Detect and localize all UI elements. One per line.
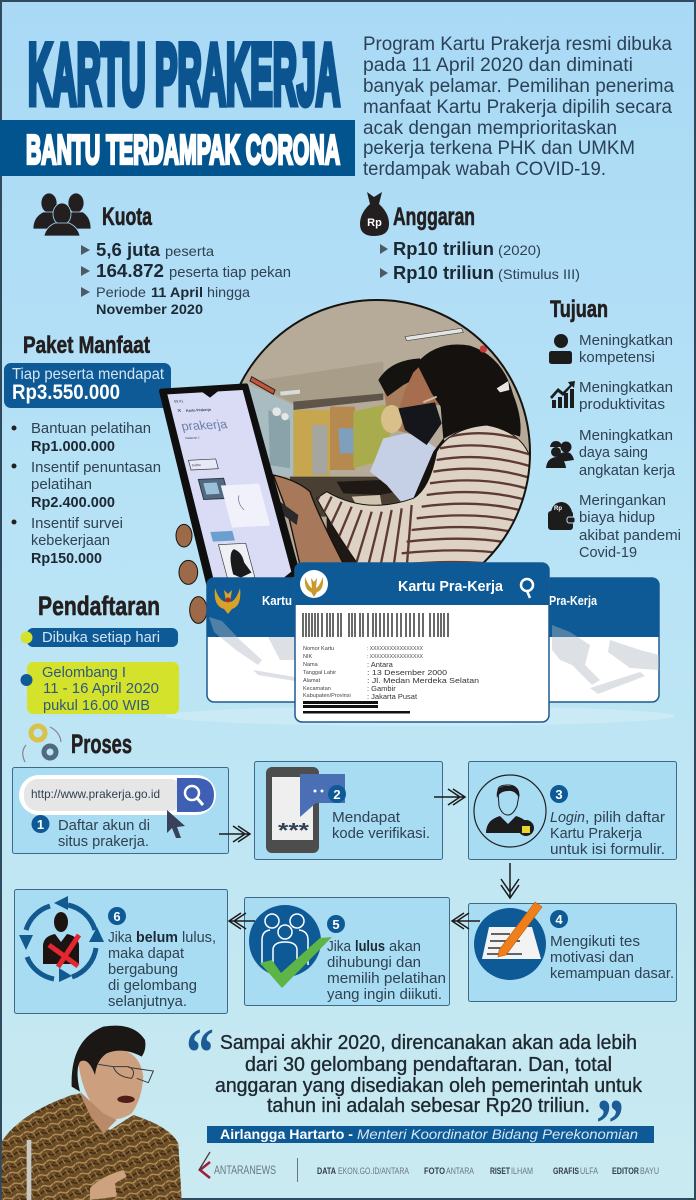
quotation text: Sampai akhir 2020, direncanakan akan ada lebih	[220, 1032, 637, 1054]
step 2 panel: kode verifikasi.	[332, 825, 430, 842]
quotation text: tahun ini adalah sebesar Rp20 triliun.	[267, 1095, 590, 1117]
step 5 panel: yang ingin diikuti.	[327, 986, 442, 1003]
icon: money bag (anggaran): Rp	[367, 217, 382, 229]
icon: money bag (anggaran)	[360, 192, 389, 236]
front card: Kartu Pra-Kerja	[295, 563, 549, 722]
step 4 panel	[468, 902, 676, 1002]
footer credits: BAYU	[640, 1166, 659, 1176]
tujuan list: Meningkatkan	[579, 427, 673, 444]
quotation text	[215, 1032, 643, 1117]
kuota list: 11 April	[151, 284, 203, 300]
step 1 panel: Daftar akun di	[58, 817, 150, 834]
front card: Kartu Pra-Kerja: Tanggal Lahir	[303, 670, 336, 676]
heading: Anggaran: Anggaran	[393, 203, 475, 231]
phone held in hand: prakerja	[180, 417, 230, 433]
intro paragraph: acak dengan memprioritaskan	[363, 118, 617, 139]
portrait: Airlangga Hartarto	[2, 1026, 182, 1200]
anggaran list: Rp10 triliun	[393, 263, 494, 283]
icon: gears	[23, 726, 61, 762]
quotation text: anggaran yang disediakan oleh pemerintah untuk	[215, 1075, 643, 1097]
icon: group with check	[262, 914, 308, 970]
front card: Kartu Pra-Kerja: Alamat	[303, 678, 321, 684]
speaker band: Menteri Koordinator Bidang Perekonomian	[357, 1126, 638, 1142]
tujuan list: Meningkatkan	[579, 332, 673, 349]
intro paragraph: banyak pelamar. Pemilihan penerima	[363, 76, 674, 97]
step 2 panel: Mendapat	[332, 809, 401, 826]
tujuan list: kompetensi	[579, 349, 655, 366]
front card: Kartu Pra-Kerja: Kecamatan	[303, 686, 331, 692]
intro paragraph	[363, 34, 674, 180]
front card: Kartu Pra-Kerja: NIK	[303, 654, 312, 660]
icon: wallet: Rp	[554, 506, 562, 512]
footer credits	[297, 1158, 659, 1182]
phone held in hand: Kartu Prakerja	[185, 408, 212, 413]
panel: gelombang I schedule: pukul 16.00 WIB	[43, 697, 150, 714]
front card: Kartu Pra-Kerja: : Jakarta Pusat	[367, 692, 418, 701]
icon: wallet	[548, 502, 575, 530]
step 5 panel: memilih pelatihan	[327, 970, 446, 987]
icon: garuda emblem	[215, 588, 240, 614]
icon: people (kuota)	[33, 193, 91, 236]
subtitle band: BANTU TERDAMPAK CORONA	[26, 126, 340, 172]
panel: paket manfaat total: Tiap peserta mendapat	[12, 366, 165, 383]
tujuan list: daya saing	[579, 444, 648, 461]
step 6 panel: belum	[136, 929, 178, 946]
step 5 panel: 5	[332, 917, 340, 932]
subtitle band	[0, 120, 355, 176]
phone held in hand: Halaman 1	[185, 436, 201, 440]
quotation text: dari 30 gelombang pendaftaran. Dan, total	[245, 1054, 612, 1076]
step 4 panel: motivasi dan	[550, 949, 634, 966]
step 5 panel: akan	[389, 938, 421, 955]
front card: Kartu Pra-Kerja: Kartu Pra-Kerja	[398, 578, 504, 595]
step 6 panel: maka dapat	[108, 945, 185, 962]
icon: cursor	[167, 810, 185, 838]
footer credits: RISET	[490, 1166, 510, 1176]
step 4 panel: 4	[555, 912, 563, 927]
panel: gelombang I schedule: 11 - 16 April 2020	[43, 680, 159, 697]
kuota list: 164.872	[96, 261, 164, 281]
arrow: step 2 to 3	[434, 789, 465, 805]
intro paragraph: manfaat Kartu Prakerja dipilih secara	[363, 97, 672, 118]
phone held in hand: Daftar	[191, 463, 202, 467]
step 2 panel: ***	[278, 820, 309, 842]
step 3 panel: Kartu Prakerja	[550, 825, 643, 842]
front card: Kartu Pra-Kerja: : Jl. Medan Merdeka Selatan	[367, 676, 479, 685]
tujuan list: produktivitas	[579, 396, 665, 413]
card shadow	[165, 706, 675, 726]
panel: gelombang I schedule: Gelombang I	[42, 664, 126, 681]
pill: open every day: Dibuka setiap hari	[42, 629, 160, 646]
step 1 panel: 1	[37, 817, 44, 832]
tujuan list: akibat pandemi	[579, 527, 681, 544]
step 3 panel: Login	[550, 809, 585, 826]
step 3 panel: 3	[555, 787, 563, 802]
step 3 panel	[468, 762, 676, 860]
step 2 panel: 2	[333, 787, 341, 802]
front card: Kartu Pra-Kerja: : XXXXXXXXXXXXXXXX	[367, 654, 423, 660]
heading: Paket Manfaat: Paket Manfaat	[23, 332, 150, 359]
kuota list: November 2020	[96, 301, 203, 317]
step 2 panel	[254, 762, 442, 860]
kuota list	[81, 240, 291, 317]
speaker band	[207, 1126, 654, 1143]
icon: rejected person in cycle	[19, 896, 104, 982]
step 5 panel: dihubungi dan	[327, 954, 421, 971]
step 5 panel: lulus	[355, 938, 385, 955]
phone held in hand: 09:41	[174, 399, 184, 404]
front card: Kartu Pra-Kerja: : 13 Desember 2000	[367, 668, 447, 677]
front card: Kartu Pra-Kerja: : XXXXXXXXXXXXXXXX	[367, 646, 423, 652]
step 5 panel: Jika	[327, 938, 352, 955]
step 6 panel: selanjutnya.	[108, 993, 187, 1010]
intro paragraph: pada 11 April 2020 dan diminati	[363, 55, 633, 76]
step 6 panel: bergabung	[108, 961, 178, 978]
tujuan list: angkatan kerja	[579, 462, 676, 479]
icon: paper and pen	[482, 902, 542, 959]
footer credits: FOTO	[424, 1166, 445, 1176]
benefits list: Insentif survei	[31, 515, 123, 532]
arrow: step 5 to 6	[229, 913, 255, 929]
front card: Kartu Pra-Kerja: : Gambir	[367, 684, 396, 693]
intro paragraph: terdampak wabah COVID-19.	[363, 159, 606, 180]
icon: magnifier person	[521, 579, 533, 598]
pill: open every day	[20, 628, 178, 647]
step 5 panel	[244, 898, 450, 1006]
phone held in hand	[161, 386, 297, 628]
arrow: step 4 to 5	[452, 913, 480, 929]
front card: Kartu Pra-Kerja: : Antara	[367, 660, 394, 669]
benefits list: Rp1.000.000	[31, 438, 115, 455]
benefits list: kebekerjaan	[31, 532, 110, 549]
step 3 panel: , pilih daftar	[585, 809, 665, 826]
footer credits: GRAFIS	[553, 1166, 579, 1176]
barcode	[303, 613, 448, 637]
heading: Proses: Proses	[71, 729, 132, 759]
arrow: step 3 to 4	[501, 863, 519, 898]
anggaran list: (Stimulus III)	[498, 266, 580, 282]
intro paragraph: Program Kartu Prakerja resmi dibuka	[363, 34, 672, 55]
step 6 panel	[14, 890, 228, 1014]
step 3 panel: untuk isi formulir.	[550, 841, 665, 858]
tujuan list: Meringankan	[579, 492, 666, 509]
benefits list: Bantuan pelatihan	[31, 420, 151, 437]
step 4 panel: Mengikuti tes	[550, 933, 640, 950]
kuota list: peserta	[165, 243, 214, 259]
footer credits: DATA	[317, 1166, 336, 1176]
logo: Antara News	[199, 1152, 276, 1178]
quote mark: opening: “	[186, 1015, 214, 1092]
logo: Antara News: ANTARANEWS	[214, 1163, 276, 1177]
kuota list: hingga	[207, 284, 250, 300]
icon: workers	[546, 441, 574, 468]
anggaran list: (2020)	[498, 242, 541, 258]
front card: Kartu Pra-Kerja: Nama	[303, 662, 319, 668]
benefits list: Rp2.400.000	[31, 494, 115, 511]
footer credits: ILHAM	[511, 1166, 533, 1176]
anggaran list	[380, 239, 580, 283]
step 6 panel: 6	[113, 909, 121, 924]
quote mark: closing: ”	[596, 1086, 624, 1163]
icon: person competence	[549, 334, 572, 364]
step 1 panel: situs prakerja.	[58, 833, 149, 850]
step 4 panel: kemampuan dasar.	[550, 965, 674, 982]
back card: Kartu Pra-Kerja	[207, 578, 659, 702]
panel: paket manfaat total	[4, 363, 171, 408]
arrow: step 1 to 2	[219, 826, 250, 842]
benefits list: Insentif penuntasan	[31, 459, 161, 476]
kuota list: Periode	[96, 284, 146, 300]
tujuan list: Meningkatkan	[579, 379, 673, 396]
intro paragraph: pekerja terkena PHK dan UMKM	[363, 138, 635, 159]
photo: people wearing masks	[239, 299, 531, 578]
heading: Pendaftaran: Pendaftaran	[38, 591, 160, 621]
footer credits: EDITOR	[612, 1166, 639, 1176]
kuota list: peserta tiap pekan	[169, 264, 291, 281]
tujuan list: biaya hidup	[579, 509, 655, 526]
icon: garuda emblem small	[305, 577, 323, 597]
panel: paket manfaat total: Rp3.550.000	[12, 381, 120, 404]
footer credits: ULFA	[580, 1166, 598, 1176]
anggaran list: Rp10 triliun	[393, 239, 494, 259]
icon: growth chart	[550, 381, 575, 408]
back card: Kartu Pra-Kerja: Pra-Kerja	[549, 593, 598, 608]
step 1 panel: http://www.prakerja.go.id	[31, 787, 160, 801]
benefits list	[12, 420, 161, 567]
footer credits: ANTARA	[446, 1166, 474, 1176]
step 6 panel: di gelombang	[108, 977, 197, 994]
panel: gelombang I schedule	[20, 662, 179, 714]
back card: Kartu Pra-Kerja: Kartu	[262, 593, 292, 608]
step 6 panel: lulus,	[182, 929, 216, 946]
footer credits: EKON.GO.ID/ANTARA	[338, 1166, 409, 1176]
heading: Kuota: Kuota	[102, 203, 153, 231]
speaker band: Airlangga Hartarto -	[220, 1126, 353, 1142]
benefits list: Rp150.000	[31, 550, 102, 567]
phone held in hand: ✕	[177, 408, 183, 414]
tujuan list	[579, 332, 681, 561]
benefits list: pelatihan	[31, 476, 92, 493]
heading: Tujuan: Tujuan	[550, 296, 608, 323]
kuota list: 5,6 juta	[96, 240, 161, 260]
step 1 panel	[12, 768, 228, 854]
front card: Kartu Pra-Kerja: Kabupaten/Provinsi	[303, 693, 351, 699]
step 6 panel: Jika	[108, 929, 133, 946]
front card: Kartu Pra-Kerja: Nomor Kartu	[303, 646, 334, 652]
icon: user with lock	[486, 785, 534, 836]
tujuan list: Covid-19	[579, 544, 637, 561]
